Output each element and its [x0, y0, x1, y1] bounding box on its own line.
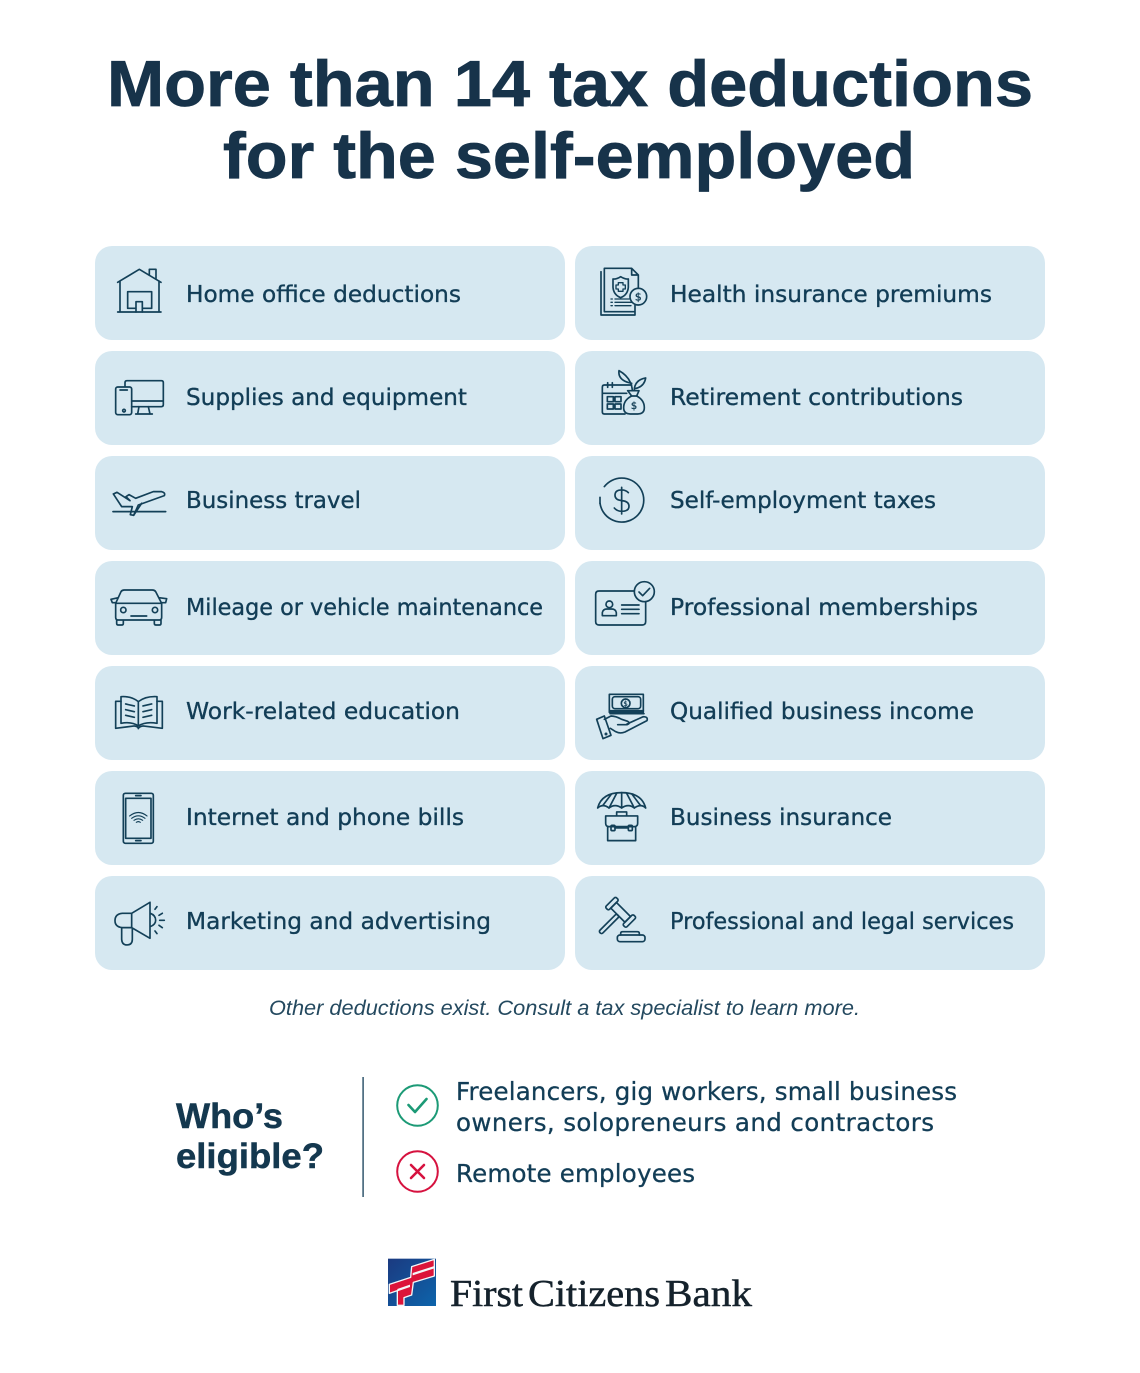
panel: self-employment taxes — [575, 456, 1045, 550]
wordmark: Bank — [665, 1273, 752, 1315]
text: Remote employees — [456, 1159, 695, 1188]
icon: dollar circle — [600, 478, 644, 522]
icon: insurance document — [601, 268, 647, 315]
label: Work-related education — [186, 697, 460, 725]
icon: calendar and money bag — [602, 371, 646, 414]
label: Self-employment taxes — [670, 486, 936, 514]
title: More than 14 tax deductions — [107, 47, 1033, 120]
icon: airplane — [113, 492, 166, 515]
panel: home office deductions — [95, 246, 565, 340]
label: Marketing and advertising — [186, 907, 491, 935]
panel: qualified business income — [575, 666, 1045, 760]
panel: business travel — [95, 456, 565, 550]
panel: retirement contributions — [575, 351, 1045, 445]
icon: megaphone — [115, 902, 164, 945]
icon: gavel — [590, 897, 645, 943]
icon: house — [118, 269, 161, 312]
panel: professional and legal services — [575, 876, 1045, 970]
text — [456, 1077, 957, 1137]
icon: computer and phone — [116, 381, 163, 415]
wordmark — [450, 1273, 752, 1315]
panel: health insurance premiums — [575, 246, 1045, 340]
panel: supplies and equipment — [95, 351, 565, 445]
wordmark: First — [450, 1273, 523, 1315]
label: Internet and phone bills — [186, 803, 464, 831]
footnote: Other deductions exist. Consult a tax specialist to learn more. — [269, 997, 860, 1020]
panel: internet and phone bills — [95, 771, 565, 865]
text: owners, solopreneurs and contractors — [456, 1108, 934, 1137]
icon: calendar and money bag: $ — [631, 401, 637, 412]
heading: who's eligible: Who’s — [176, 1097, 283, 1136]
panel: marketing and advertising — [95, 876, 565, 970]
logo: First Citizens Bank — [388, 1259, 752, 1315]
panel: professional memberships — [575, 561, 1045, 655]
label: Health insurance premiums — [670, 280, 992, 308]
icon: umbrella over briefcase — [598, 793, 646, 841]
logo mark — [388, 1259, 436, 1306]
heading: who's eligible — [176, 1097, 324, 1176]
text: Freelancers, gig workers, small business — [456, 1077, 957, 1106]
icon: red cross — [397, 1151, 438, 1192]
title — [107, 47, 1033, 192]
icon: hand holding money: $ — [623, 700, 628, 708]
label: Qualified business income — [670, 697, 974, 725]
icon: car — [111, 590, 167, 625]
panel: business insurance — [575, 771, 1045, 865]
ineligible item — [397, 1151, 695, 1192]
label: Professional memberships — [670, 593, 978, 621]
panel: work-related education — [95, 666, 565, 760]
title: for the self-employed — [223, 119, 915, 192]
label: Professional and legal services — [670, 907, 1014, 935]
label: Supplies and equipment — [186, 383, 467, 411]
eligible item — [397, 1077, 957, 1137]
wordmark: Citizens — [528, 1273, 660, 1315]
label: Business travel — [186, 486, 361, 514]
label: Retirement contributions — [670, 383, 963, 411]
panel: mileage or vehicle maintenance — [95, 561, 565, 655]
icon: insurance document: $ — [635, 290, 642, 303]
icon: hand holding money — [597, 694, 647, 739]
icon: membership card with check — [596, 582, 654, 625]
label: Business insurance — [670, 803, 892, 831]
icon: open book — [116, 697, 162, 729]
icon: phone with wifi — [123, 793, 153, 843]
heading: who's eligible: eligible? — [176, 1137, 324, 1176]
icon: green check — [397, 1085, 438, 1126]
label: Home office deductions — [186, 280, 461, 308]
label: Mileage or vehicle maintenance — [186, 593, 543, 621]
